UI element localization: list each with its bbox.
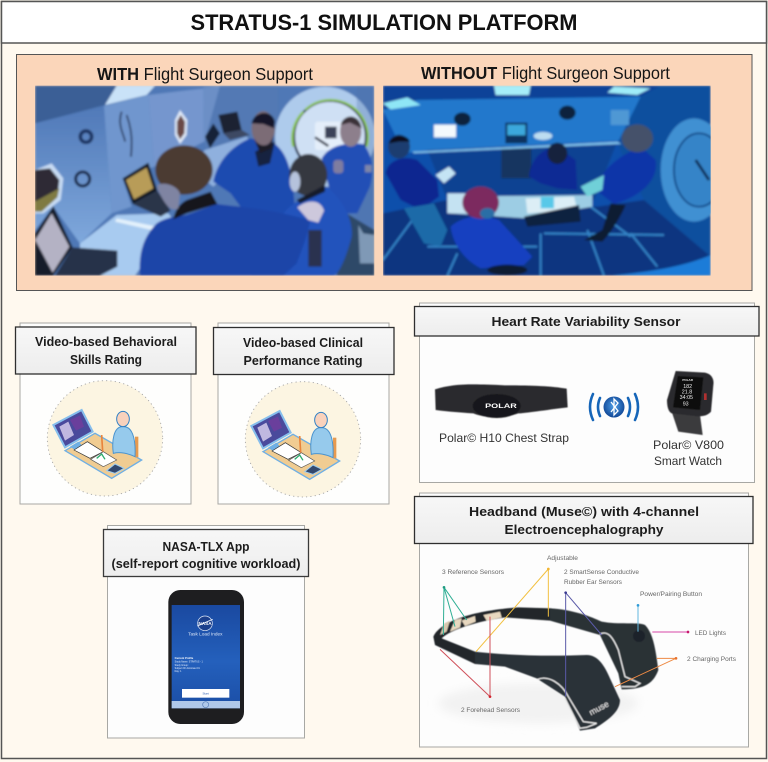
icon: Polar V800 smart watch: 182 [683,384,692,390]
header: Muse headband EEG: Headband (Muse©) with 4-channel [469,504,699,519]
title bar [2,2,766,43]
label: charging ports: 2 Charging Ports [687,657,736,663]
image: Muse headband with sensor callouts: muse [587,699,611,717]
header: NASA-TLX app [104,530,308,576]
icon: smartphone with task load index: Study Name: STRATUS - 1 [175,661,204,664]
icon: Polar V800 smart watch: 21.8 [682,390,692,396]
icon: Polar V800 smart watch: POLAR [682,378,694,382]
icon: Polar V800 smart watch: 34:05 [680,395,693,401]
label: Polar V800 smart watch: Smart Watch [654,454,722,468]
label: adjustable: Adjustable [547,556,579,562]
label: forehead sensors: 2 Forehead Sensors [461,708,520,714]
header: heart rate variability sensor: Heart Rate Variability Sensor [492,314,680,329]
header: NASA-TLX app: NASA-TLX App [162,539,250,554]
icon: smartphone with task load index: Day: 1 [175,671,182,673]
header: Muse headband EEG: Electroencephalography [504,522,664,537]
panel: Muse headband [420,493,748,747]
icon: reviewer at desk [47,381,163,496]
panel: NASA-TLX app [108,526,304,738]
panel: behavioral skills rating [20,323,191,504]
panel: heart rate variability sensor [420,303,754,482]
icon: smartphone with task load index: Start [203,692,209,696]
icon: Polar H10 chest strap [435,384,568,418]
header: Muse headband EEG [414,496,753,544]
photo: crew with flight surgeon support [35,86,375,276]
header: video-based behavioral skills rating: Skills Rating [70,352,142,367]
panel: flight surgeon conditions [16,54,752,290]
label: ear sensors: Rubber Ear Sensors [564,580,622,586]
icon: bluetooth signal [590,394,638,420]
header: video-based clinical performance rating [214,328,394,374]
panel: clinical performance rating [218,323,389,504]
icon: smartphone with task load index: Current Profile [175,656,194,660]
icon: Polar V800 smart watch: 93 [683,401,689,407]
heading: without flight surgeon support: WITHOUT Flight Surgeon Support [421,63,670,83]
icon: smartphone with task load index: Study Group: [175,664,189,667]
title bar: STRATUS-1 SIMULATION PLATFORM [190,10,578,35]
label: 3 reference sensors: 3 Reference Sensors [442,570,504,576]
header: video-based behavioral skills rating: Video-based Behavioral [35,334,177,349]
header: video-based clinical performance rating: Video-based Clinical [243,335,363,350]
icon: smartphone with task load index: Task Load Index [188,632,223,638]
label: ear sensors [564,570,640,586]
label: Polar H10 chest strap: Polar© H10 Chest Strap [439,431,569,445]
photo: crew without flight surgeon support [383,86,727,276]
header: heart rate variability sensor [414,306,759,336]
image: Muse headband with sensor callouts [433,556,736,731]
header: video-based clinical performance rating: Performance Rating [244,353,363,368]
heading: with flight surgeon support: WITH Flight Surgeon Support [97,64,313,84]
label: LED lights: LED Lights [695,631,726,637]
icon: Polar H10 chest strap: POLAR [485,403,517,410]
header: video-based behavioral skills rating [16,327,196,374]
label: power button: Power/Pairing Button [640,592,702,598]
icon: Polar V800 smart watch [667,371,714,435]
header: NASA-TLX app: (self-report cognitive workload) [112,556,300,571]
label: Polar V800 smart watch [653,438,724,468]
label: Polar V800 smart watch: Polar© V800 [653,438,724,452]
label: ear sensors: 2 SmartSense Conductive [564,570,640,576]
icon: smartphone with task load index: NASA [198,621,212,626]
icon: smartphone with task load index [168,590,244,724]
icon: reviewer at desk [245,382,361,497]
icon: smartphone with task load index: Subject ID: Astronaut 01 [175,667,200,670]
